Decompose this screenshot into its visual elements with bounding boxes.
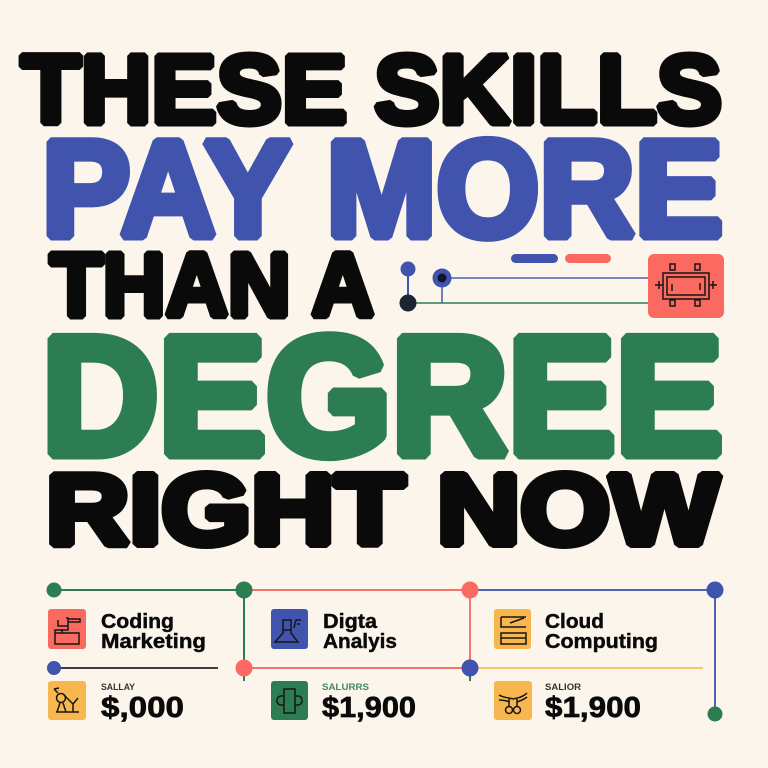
title line: THAN A: THAN A [50,236,374,336]
salary: $,000 [48,681,184,724]
label: SALURRS [322,682,369,692]
icon: chart figure [271,609,308,649]
label: SALIOR [545,682,582,692]
icon: green component [271,681,308,720]
title line: THESE SKILLS: THESE SKILLS [21,35,722,144]
skill: Cloud Computing: Computing [545,631,658,653]
circuit connector graphic [400,254,724,318]
skill: Coding Marketing [48,609,206,653]
coral pill [565,254,611,263]
icon: gear lever [48,681,86,720]
icon: chip [648,254,724,318]
label: Cloud [545,611,604,633]
icon: stacked layers [494,609,531,649]
skill: Digital Analysis [271,609,397,653]
label: SALLAY [101,682,135,692]
icon: printer [48,609,86,649]
icon: drone [494,681,532,720]
title line: PAY MORE: PAY MORE [42,113,723,266]
title line: DEGREE: DEGREE [42,302,723,490]
blue pill [511,254,558,263]
skill: Digital Analysis: Analyis [323,631,397,653]
title line: RIGHT NOW: RIGHT NOW [46,454,720,566]
label: Coding [101,611,174,633]
value: $1,900 [545,692,641,724]
value: $,000 [101,692,184,724]
label: Digta [323,611,378,633]
skill: Coding Marketing: Marketing [101,631,206,653]
skill: Cloud Computing [494,609,658,653]
salary: $1,900 right [494,681,641,724]
salary: $1,900 middle [271,681,416,724]
title [21,35,723,566]
bottom connector lines [46,582,724,722]
value: $1,900 [322,692,416,724]
